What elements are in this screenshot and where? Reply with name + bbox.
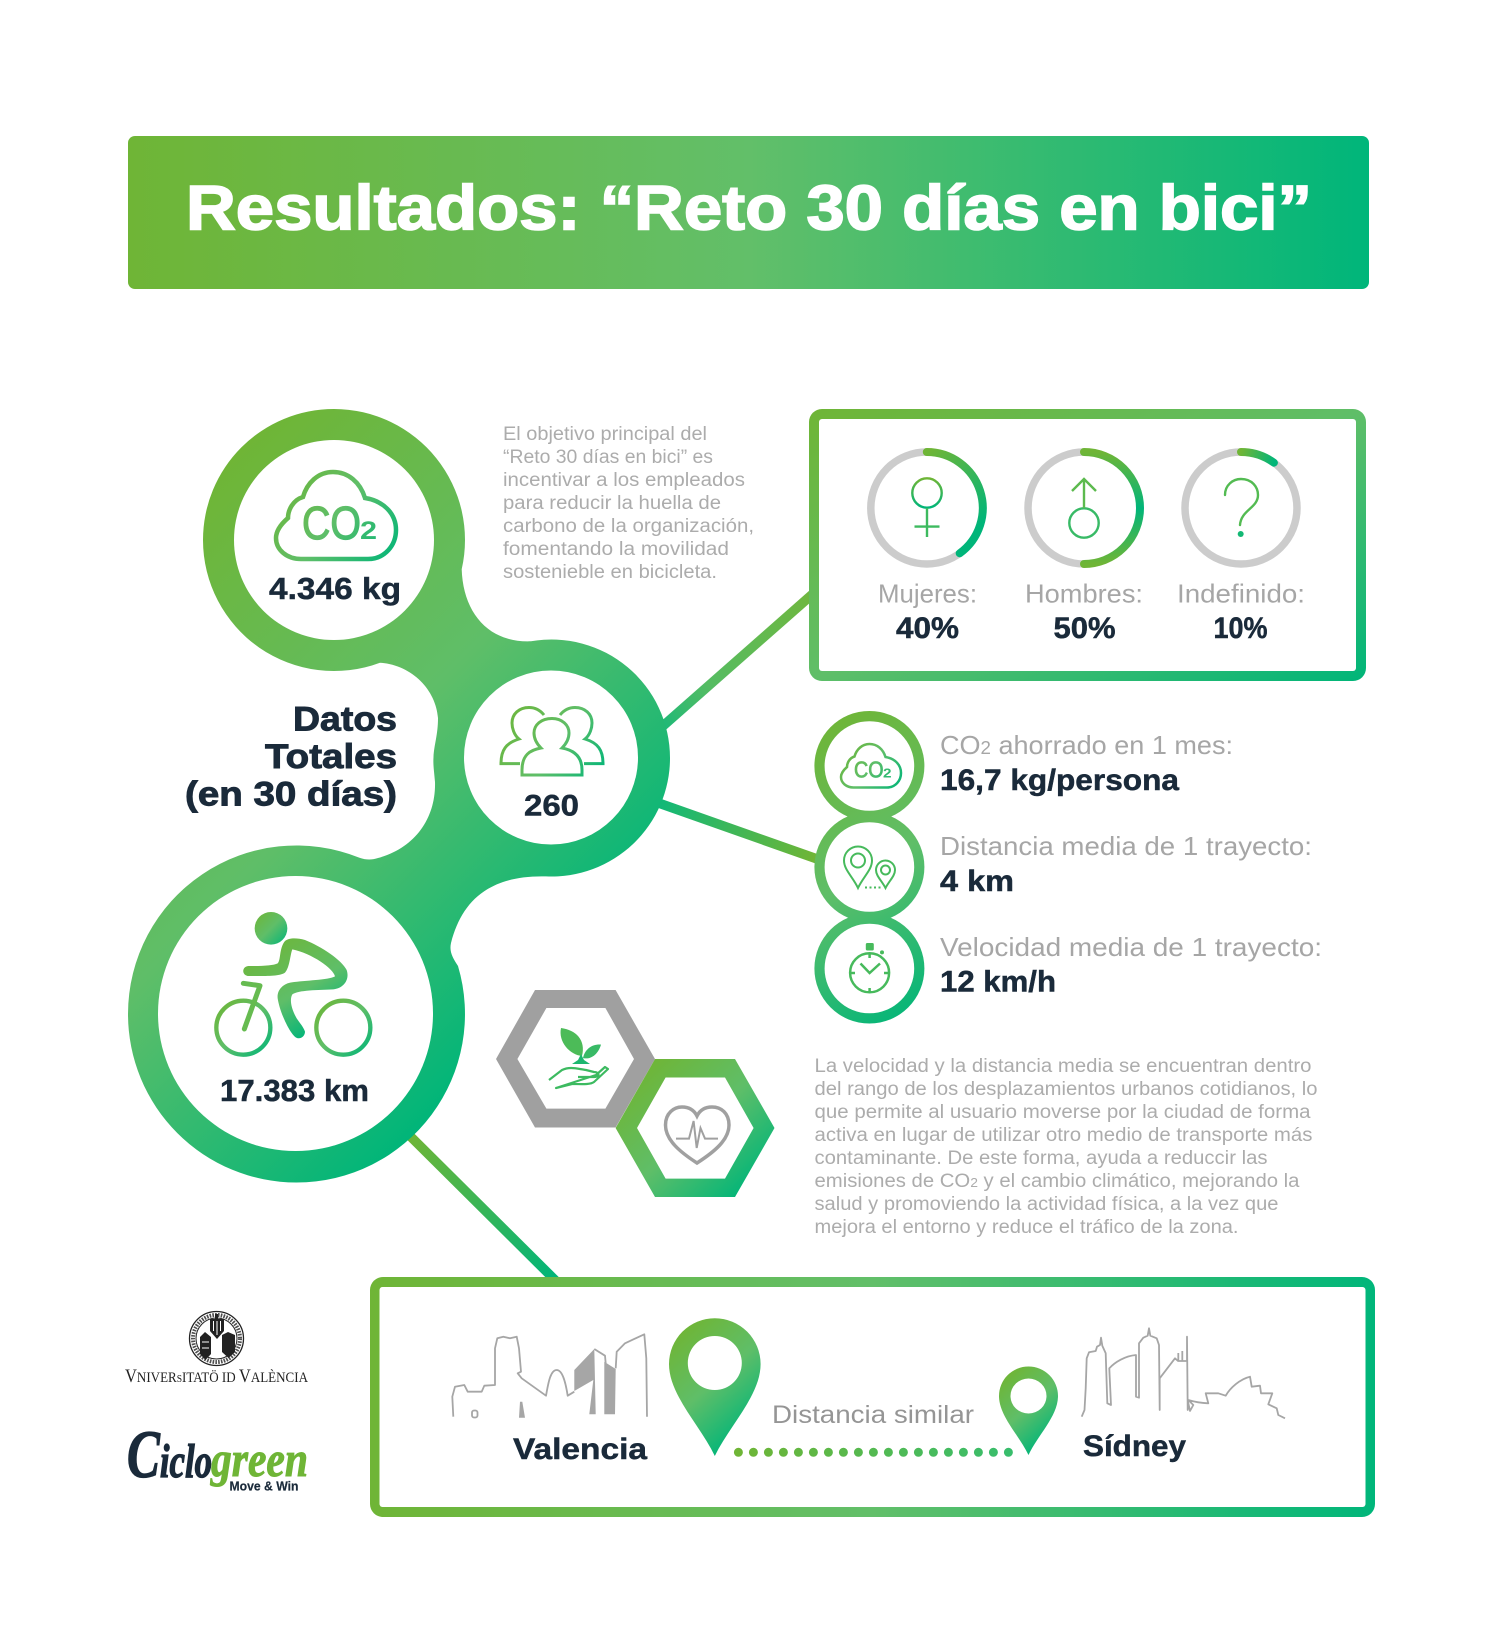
intro text block (503, 424, 754, 583)
label: mujeres: Mujeres: (878, 578, 977, 608)
icon: small pin (999, 1366, 1058, 1455)
icon: large pin (669, 1318, 761, 1456)
gauge: mujeres 40% (871, 452, 983, 564)
panel: participants (464, 670, 638, 844)
stat: average speed: 12 km/h (940, 966, 1056, 998)
icon: small CO2 cloud: 2 (883, 766, 892, 780)
panel: gender breakdown (809, 409, 1366, 681)
icon: stopwatch (850, 943, 889, 993)
wordmark: VNIVERSITATÖ ID VALÈNCIA (125, 1366, 308, 1387)
connector line to averages (650, 800, 820, 860)
stat: average speed: Velocidad media de 1 trayecto: (940, 932, 1322, 962)
intro text block: carbono de la organización, (503, 516, 754, 537)
value: 17.383 km: 17.383 km (220, 1073, 369, 1108)
icon: small CO2 cloud (841, 744, 901, 788)
icon: CO2 cloud: 2 (360, 517, 377, 545)
value: 50%: 50% (1054, 612, 1116, 645)
logo: Ciclogreen: Move & Win (230, 1480, 298, 1494)
stat: CO2 per person (940, 730, 1233, 797)
hexagon: heart health (616, 1059, 774, 1197)
value: 40%: 40% (896, 612, 959, 645)
icon: small CO2 cloud: CO (854, 756, 884, 782)
explanatory text block: que permite al usuario moverse por la ciudad de forma (814, 1102, 1311, 1123)
gauge: hombres 50% (1028, 452, 1140, 564)
connector line to gender panel (655, 592, 815, 733)
gauge: indefinido 10% (1185, 452, 1297, 564)
explanatory text block: del rango de los desplazamientos urbanos cotidianos, lo (814, 1079, 1318, 1100)
icon: map pins (844, 846, 895, 888)
intro text block: fomentando la movilidad (503, 539, 729, 560)
label: hombres: Hombres: (1025, 578, 1143, 608)
value: 260: 260 (524, 790, 579, 822)
panel: average stats circles (814, 711, 924, 1024)
value: 10%: 10% (1214, 612, 1268, 645)
stat: average distance: 4 km (940, 865, 1014, 898)
explanatory text block: emisiones de CO 2 y el cambio climático, mejorando la (814, 1171, 1300, 1192)
stat: average distance (940, 831, 1312, 898)
explanatory text block: mejora el entorno y reduce el tráfico de la zona. (814, 1217, 1238, 1238)
title banner (128, 136, 1369, 289)
stat: CO2 per person: 16,7 kg/persona (940, 764, 1179, 797)
label: distance similar: Distancia similar (772, 1401, 974, 1429)
intro text block: incentivar a los empleados (503, 470, 745, 491)
panel: total km (158, 876, 433, 1151)
logo: Ciclogreen (127, 1416, 308, 1494)
logo: Universitat de Valencia (125, 1312, 308, 1387)
heading: Datos Totales: Datos (293, 700, 397, 738)
icon: cyclist (216, 912, 370, 1055)
stat: CO2 per person: CO2 ahorrado en 1 mes: (940, 730, 1233, 760)
icon: group of people (501, 708, 603, 775)
explanatory text block: activa en lugar de utilizar otro medio de transporte más (814, 1125, 1312, 1146)
explanatory text block: contaminante. De este forma, ayuda a reduccir las (814, 1148, 1268, 1169)
seal (190, 1312, 244, 1366)
icon: CO2 cloud: CO (302, 497, 361, 549)
connector line to distance panel (405, 1131, 560, 1285)
heading: Datos Totales: (en 30 días) (185, 776, 397, 814)
heading: Datos Totales (185, 700, 397, 814)
icon: plant (549, 1028, 608, 1088)
connected circles blob (128, 409, 670, 1182)
stat: average speed (940, 932, 1322, 998)
illustration: Sidney skyline (1082, 1328, 1285, 1418)
intro text block: para reducir la huella de (503, 493, 721, 514)
intro text block: “Reto 30 días en bici” es (503, 447, 713, 468)
icon: heart with pulse (666, 1107, 729, 1163)
explanatory text block: La velocidad y la distancia media se encuentran dentro (814, 1056, 1312, 1077)
panel: CO2 total (234, 440, 434, 640)
hexagon: plant in hand (496, 990, 655, 1128)
logo: Ciclogreen: green (210, 1431, 308, 1487)
logo: Ciclogreen: Ciclo (127, 1416, 212, 1492)
panel: Valencia to Sidney distance (370, 1277, 1375, 1517)
intro text block: sostenieble en bicicleta. (503, 562, 717, 583)
title text: Resultados: “Reto 30 días en bici” (186, 174, 1312, 244)
explanatory text block: salud y promoviendo la actividad física, a la vez que (814, 1194, 1278, 1215)
value: 4.346 kg: 4.346 kg (269, 571, 401, 606)
explanatory text block (814, 1056, 1318, 1238)
heading: Datos Totales: Totales (265, 738, 397, 776)
stat: average distance: Distancia media de 1 trayecto: (940, 831, 1312, 861)
label: Sidney: Sídney (1083, 1430, 1186, 1463)
label: indefinido: Indefinido: (1177, 578, 1305, 608)
intro text block: El objetivo principal del (503, 424, 707, 445)
icon: CO2 cloud (276, 472, 396, 559)
illustration: Valencia skyline (452, 1334, 647, 1418)
label: Valencia: Valencia (513, 1433, 647, 1466)
dotted route (738, 1448, 1009, 1457)
